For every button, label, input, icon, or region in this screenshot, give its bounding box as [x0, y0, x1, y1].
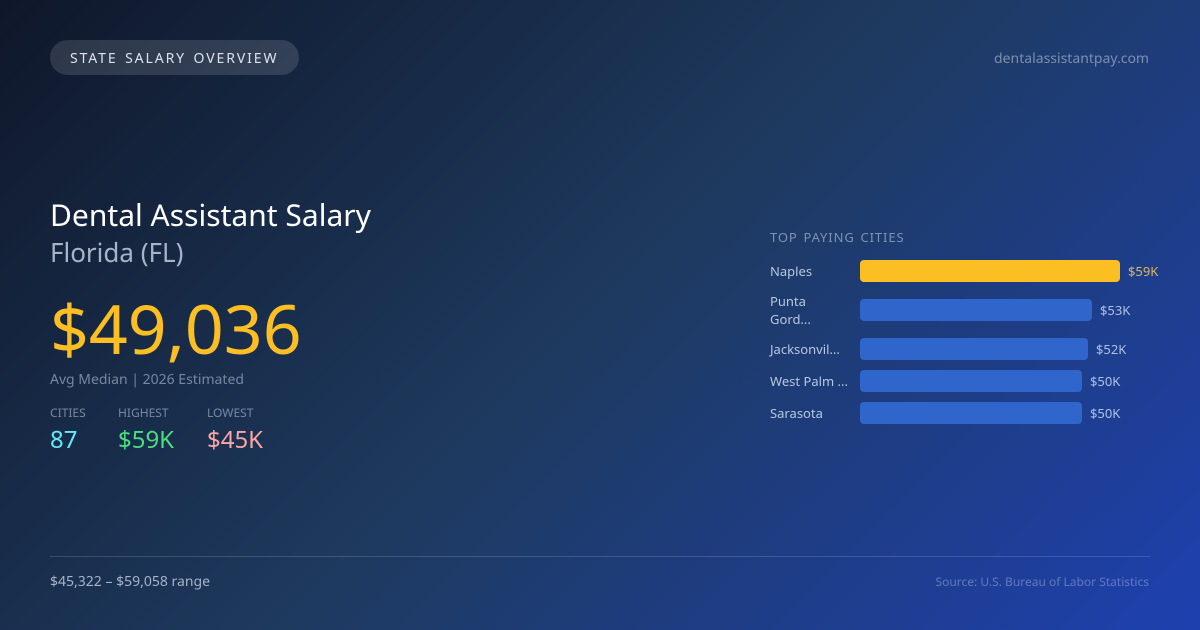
- salary caption: Avg Median | 2026 Estimated: [50, 370, 244, 389]
- bar chart: top paying cities: West Palm ...: [770, 372, 848, 390]
- row: Jacksonville: [769, 338, 1126, 360]
- panel: salary summary: [50, 194, 371, 456]
- stat: cities: CITIES: [50, 404, 86, 421]
- stat: lowest: [207, 404, 263, 456]
- stat: highest: $59K: [118, 423, 174, 456]
- bar chart: top paying cities: Gord...: [770, 310, 811, 328]
- subtitle: Florida (FL): [50, 234, 183, 270]
- row: Punta Gorda: [770, 292, 1130, 328]
- stat: cities: 87: [50, 423, 77, 456]
- stat: lowest: LOWEST: [207, 404, 253, 421]
- row: Sarasota: [770, 402, 1120, 424]
- bar chart: top paying cities: Punta: [770, 292, 806, 310]
- bar chart: top paying cities: Jacksonvil...: [770, 340, 840, 358]
- stat: highest: HIGHEST: [118, 404, 169, 421]
- salary range footer: $45,322 – $59,058 range: [50, 572, 210, 591]
- stat: lowest: $45K: [207, 423, 263, 456]
- bar chart: top paying cities: $53K: [1100, 301, 1130, 319]
- title: Dental Assistant Salary: [50, 194, 371, 235]
- average salary figure: $49,036: [50, 281, 302, 374]
- row: Naples: [770, 260, 1158, 282]
- badge: state salary overview: [50, 40, 299, 75]
- chart heading: TOP PAYING CITIES: [770, 228, 905, 246]
- bar chart: top paying cities: $50K: [1090, 372, 1120, 390]
- bar chart: top paying cities: $52K: [1096, 340, 1126, 358]
- badge: state salary overview: STATE SALARY OVERVIEW: [70, 49, 278, 68]
- source note: Source: U.S. Bureau of Labor Statistics: [936, 573, 1149, 590]
- bar chart: top paying cities: $50K: [1090, 404, 1120, 422]
- site domain: dentalassistantpay.com: [994, 49, 1149, 68]
- stat: cities: [50, 404, 86, 456]
- row: West Palm Beach: [770, 370, 1120, 392]
- bar chart: top paying cities: Sarasota: [770, 404, 823, 422]
- bar chart: top paying cities: Naples: [770, 262, 812, 280]
- stat: highest: [118, 404, 174, 456]
- bar chart: top paying cities: $59K: [1128, 262, 1158, 280]
